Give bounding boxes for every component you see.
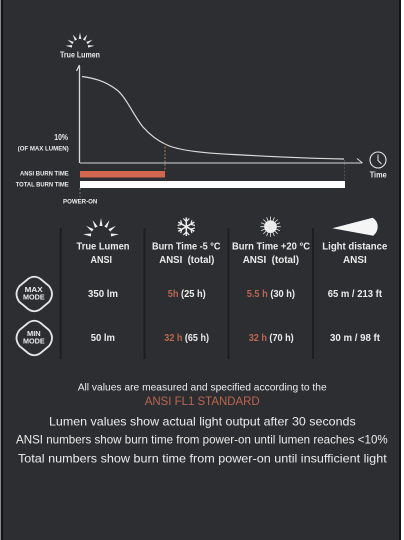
column: true lumen [76,218,130,344]
badge: max mode: MAX [25,287,43,294]
power-on tick [79,188,81,197]
label: of max lumen: (OF MAX LUMEN) [18,146,69,153]
lumen curve [82,76,344,159]
value: min: 30 m / 98 ft [330,333,380,344]
heading: Burn Time +20 °C [232,242,310,253]
axis label: true lumen: True Lumen [60,51,100,60]
subheading: ANSI [343,255,367,266]
badge: max mode: MODE [23,294,45,302]
value: min: 50 lm [91,333,115,344]
subheading: ANSI (total) [159,255,214,266]
badge: min mode: MIN [27,331,41,338]
total cutoff dashed line [344,160,346,181]
label: ten percent: 10% [54,133,68,142]
note: measurement intro: All values are measured and specified according to the [78,383,327,394]
note: lumen values: Lumen values show actual light output after 30 seconds [49,415,356,429]
icon: clock [370,152,386,168]
value: max: 350 lm [88,289,118,300]
column: burn time cold [152,218,221,344]
label: time: Time [370,170,387,179]
value: min: 32 h (65 h) [164,333,209,344]
panel: lumen decay chart [16,32,387,205]
column: light distance [322,218,387,344]
note: ANSI FL1 standard: ANSI FL1 STANDARD [145,396,260,408]
table: specifications [16,216,387,359]
bar: total burn time [80,181,345,188]
y axis [76,65,80,163]
label: total burn time: TOTAL BURN TIME [16,182,69,189]
subheading: ANSI [90,255,112,266]
icon: light beam [332,218,378,236]
note: ANSI numbers: ANSI numbers show burn time from power-on until lumen reaches <10% [16,433,388,447]
column dividers [60,228,314,359]
icon: snowflake [178,218,195,236]
bar: ANSI burn time [80,171,165,178]
badge: min mode: MODE [23,338,45,346]
x axis [80,158,362,163]
note: total numbers: Total numbers show burn time from power-on until insufficient light [18,451,387,465]
badge: max mode [16,277,52,311]
heading: True Lumen [76,242,130,253]
heading: Burn Time -5 °C [152,242,221,253]
label: power-on: POWER-ON [63,198,98,205]
value: max: 65 m / 213 ft [328,289,382,300]
label: ANSI burn time: ANSI BURN TIME [20,171,69,178]
column: burn time warm [232,216,310,344]
icon: rising sun [83,218,119,236]
ANSI cutoff dashed line [164,143,166,171]
value: max: 5.5 h (30 h) [247,289,295,300]
value: max: 5h (25 h) [168,289,206,300]
badge: min mode [16,321,52,355]
heading: Light distance [322,242,387,253]
text block: footnotes [16,383,388,465]
value: min: 32 h (70 h) [249,333,294,344]
subheading: ANSI (total) [243,255,299,266]
icon: sun [260,216,281,237]
icon: rising sun [65,32,95,48]
